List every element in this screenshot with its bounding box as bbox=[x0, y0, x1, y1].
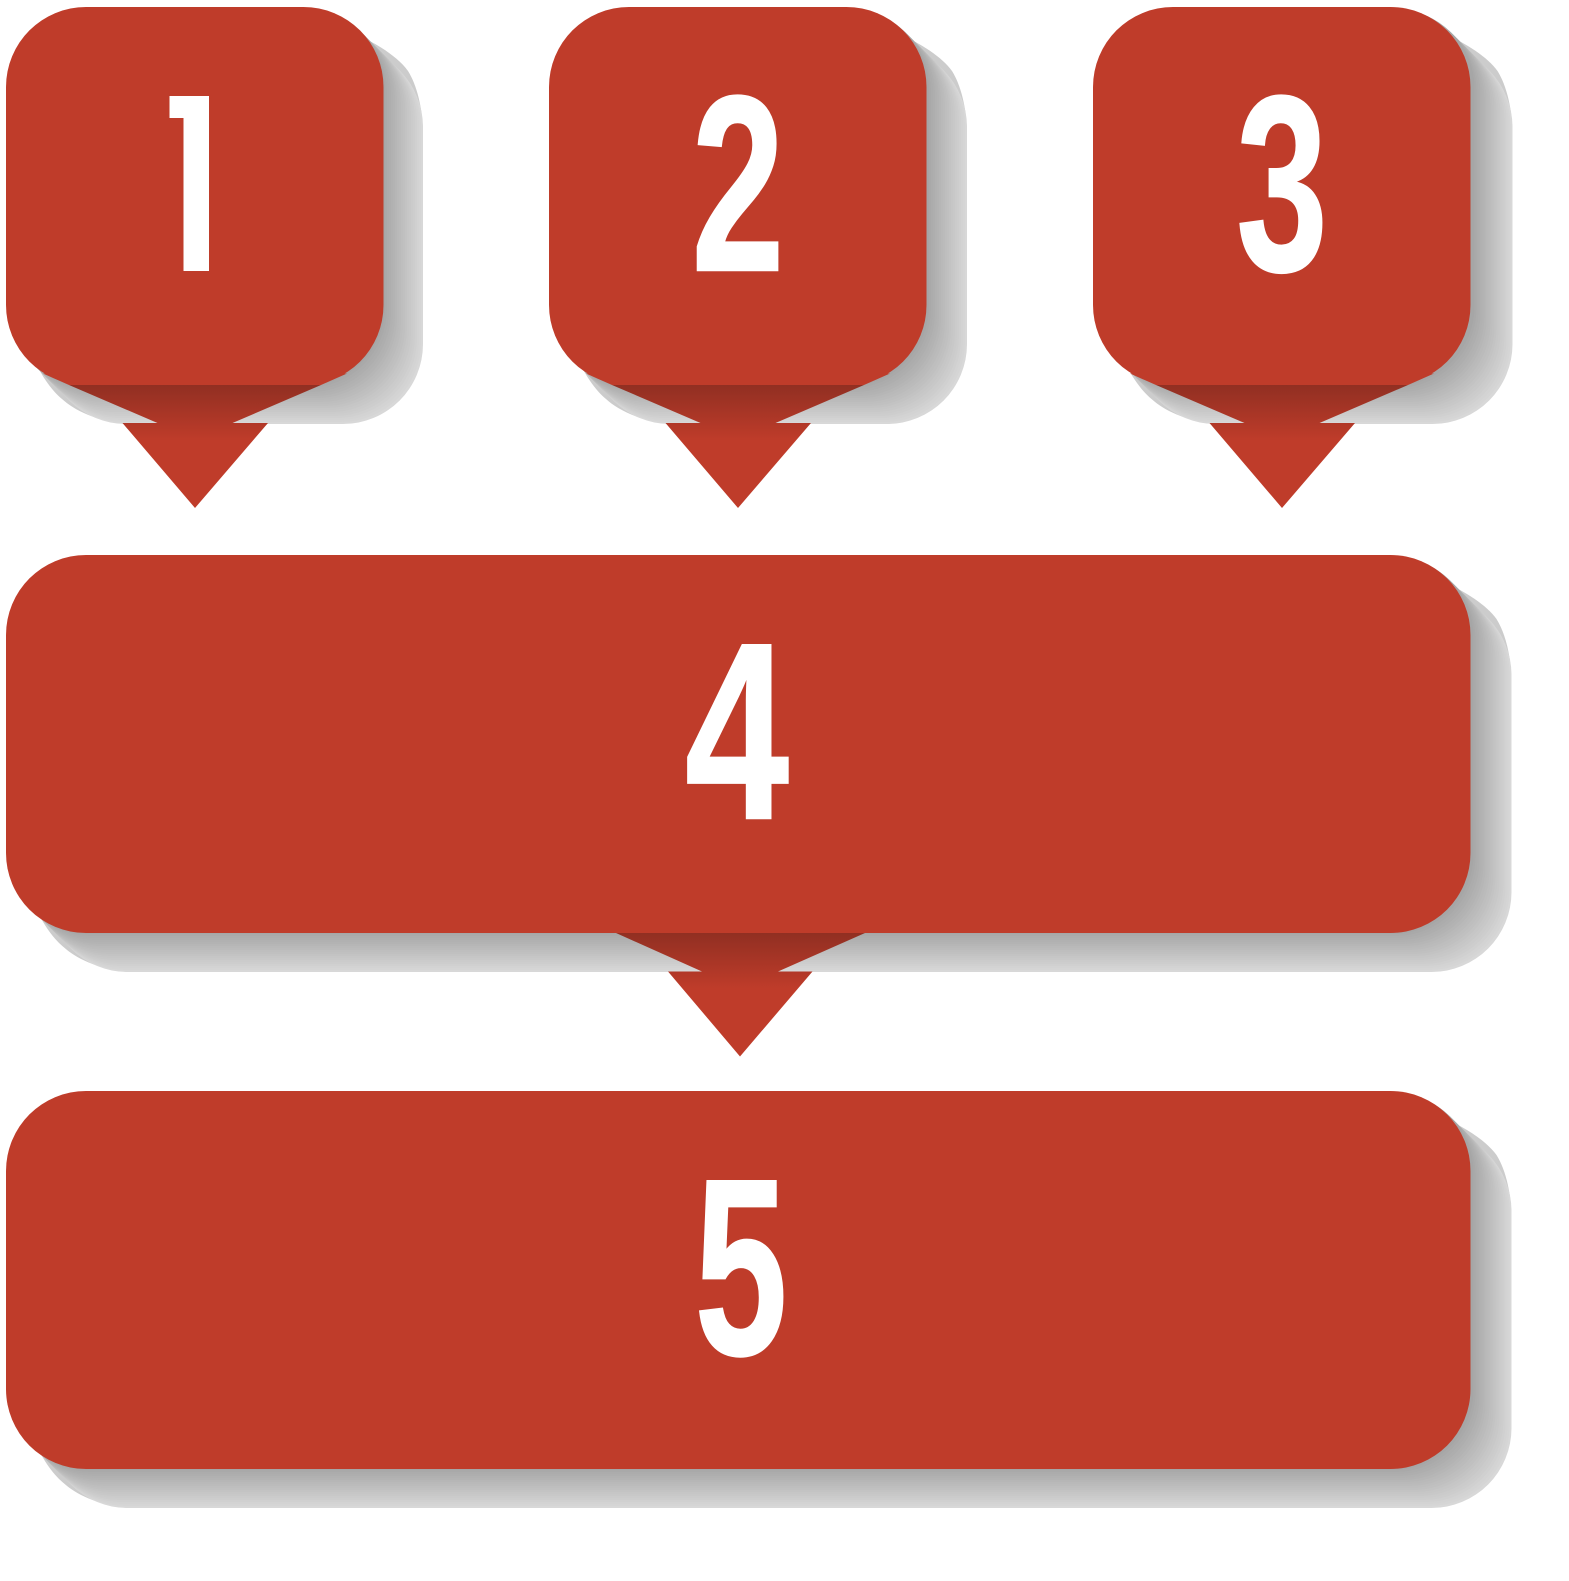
panel: step 5 wide callout bbox=[6, 1091, 1512, 1508]
panel: step 1 callout bbox=[6, 7, 423, 508]
box: step 3 with pointer bbox=[1093, 7, 1470, 508]
shadow: step 5 bbox=[10, 1093, 1512, 1508]
pointer: step 4 bbox=[616, 933, 865, 1056]
panel: step 3 callout bbox=[1093, 7, 1512, 508]
box: step 4 bbox=[6, 555, 1470, 933]
shadow: step 4 bbox=[10, 557, 1512, 972]
shadow: step 3 bbox=[1098, 9, 1512, 424]
number 5: 5 bbox=[694, 1127, 788, 1409]
panel: step 2 callout bbox=[549, 7, 967, 508]
shadow: step 2 bbox=[552, 9, 967, 424]
panel: step 4 wide callout bbox=[6, 555, 1512, 1056]
number 2: 2 bbox=[691, 45, 785, 325]
number 1: 1 bbox=[140, 41, 244, 326]
box: step 1 with pointer bbox=[6, 7, 384, 508]
box: step 2 with pointer bbox=[549, 7, 926, 508]
shadow: step 1 bbox=[8, 9, 423, 424]
number 3: 3 bbox=[1236, 45, 1328, 325]
box: step 5 bbox=[6, 1091, 1470, 1469]
number 4: 4 bbox=[685, 591, 789, 873]
number 1 bbox=[170, 96, 209, 271]
